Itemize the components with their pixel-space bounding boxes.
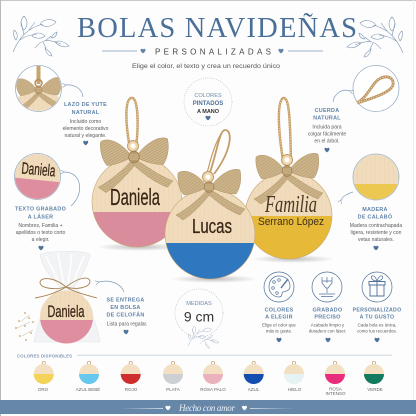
swatch: verde: VERDE [367,387,383,392]
icon: heart [374,246,378,250]
body: colgar fácilmente [308,132,346,138]
arrow [99,281,124,292]
engraved text: Lucas [192,216,232,238]
swatch: azul [244,361,264,392]
footer band [0,400,416,414]
ornament: Familia yellow [245,98,335,263]
swatch: rojo: ROJO [125,387,138,392]
feature: personalizado a tu gusto [353,272,401,342]
engraved text: Daniela [110,184,160,210]
heading: NATURAL [72,110,100,116]
heading: A ELEGIR [265,314,293,320]
icon: gift [362,272,392,302]
body: a elegir. [32,237,49,243]
badge: medidas [175,289,223,348]
icon: laser engraver [312,272,342,302]
swatch: rosa intenso [325,361,346,396]
heading: A TU GUSTO [360,314,394,320]
heading: PRECISO [314,314,341,320]
detail circle: engraved text: Daniela [21,160,57,181]
detail circle: bow [15,65,62,112]
body: Elige el color que [262,322,296,328]
title: BOLAS NAVIDEÑAS [77,12,357,44]
swatch: rosa palo: ROSA PALO [200,387,226,392]
swatch: azul bebe: AZUL BEBÉ [76,386,100,392]
icon: heart [83,141,88,145]
arrow [341,192,353,200]
feature: colores a elegir [262,272,296,342]
callout: bolsa de celofan [15,251,147,346]
swatch: azul: AZUL [248,387,260,392]
icon: heart [39,246,43,250]
heading: CUERDA [315,108,339,114]
icon: floral sprig right [347,17,403,57]
badge: colores pintados a mano: A MANO [197,109,220,115]
swatch: rosa intenso: ROSA [329,386,342,392]
swatch: oro: ORO [38,387,49,392]
callout: madera de calabo [341,153,402,250]
icon: palette [264,272,294,302]
body: Nombres, Familia + [18,223,63,229]
colores disponibles [17,354,392,396]
body: Cada bola es única, [358,322,396,328]
body: apellidos o texto corto [16,230,65,236]
callout: texto grabado a laser [14,153,80,250]
body: en el árbol. [314,138,340,144]
badge: colores pintados a mano: PINTADOS [193,101,223,107]
heading: LAZO DE YUTE [64,102,107,108]
heading: SE ENTREGA [106,298,145,304]
detail circle: rope [353,66,399,112]
icon: floral sprig left [13,16,69,56]
heading: TEXTO GRABADO [15,206,66,212]
body: Acabado limpio y [311,322,345,328]
arrow [64,172,80,206]
product: ornament in cellophane bag: Daniela [48,302,85,321]
icon: heart [325,148,329,152]
swatch: plata [163,361,183,392]
heading: NATURAL [313,116,341,122]
body: Madera contrachapada [350,223,402,229]
body: vetas naturales. [358,237,394,243]
subtitle line: PERSONALIZADAS [155,48,271,56]
ornament: Lucas blue [163,130,258,283]
swatch: verde [364,361,384,392]
arrow [66,85,83,97]
arrow [333,90,350,102]
callout: lazo de yute [10,64,109,147]
heading: MADERA [362,207,388,213]
icon: heart [326,338,330,342]
icon: heart [277,338,281,342]
section heading: COLORES DISPONIBLES [17,354,72,358]
body: Incluido como [70,119,101,125]
heading: A LÁSER [28,214,53,220]
badge: medidas: MEDIDAS [186,301,212,307]
badge: colores pintados a mano [184,78,232,126]
ornament: Familia yellow: Serrano López [258,216,324,228]
icon: heart [124,330,128,334]
body: elemento decorativo [63,126,109,132]
detail circle: wood [352,153,400,201]
callout: cuerda natural [308,66,399,152]
engraved text: Familia [264,192,317,218]
badge: medidas: 9 cm [184,308,214,324]
swatch: rosa intenso: INTENSO [325,391,346,396]
icon: heart [375,338,379,342]
heading: DE CELOFÁN [106,312,145,318]
body: duradero con láser. [309,328,346,334]
body: Incluida para [312,124,342,130]
feature: grabado preciso [309,272,346,342]
heading: PERSONALIZADO [353,308,401,314]
badge: colores pintados a mano: COLORES [194,93,222,99]
swatch: plata: PLATA [166,387,180,392]
swatch: oro [34,361,54,392]
heading: GRABADO [313,308,342,314]
body: natural y elegante. [65,133,106,139]
body: como tus recuerdos. [357,328,397,334]
header [13,12,403,70]
footer text: Hecho con amor [178,403,235,413]
swatch: rosa palo [200,361,226,392]
subtitle line [102,48,323,56]
swatch: rojo [121,361,141,392]
body: más te guste. [266,328,292,334]
swatch: azul bebe [76,361,100,392]
heading: COLORES [265,308,293,314]
ornament: Daniela pink [90,98,185,251]
heading: EN BOLSA [110,305,141,311]
swatch: hielo: HIELO [288,387,302,392]
heading: DE CALABÓ [358,212,392,220]
body: ligera, resistente y con [351,230,402,236]
tagline: Elige el color, el texto y crea un recuerdo único [132,63,280,70]
body: Lista para regalar. [107,322,147,328]
swatch: hielo [284,361,304,392]
